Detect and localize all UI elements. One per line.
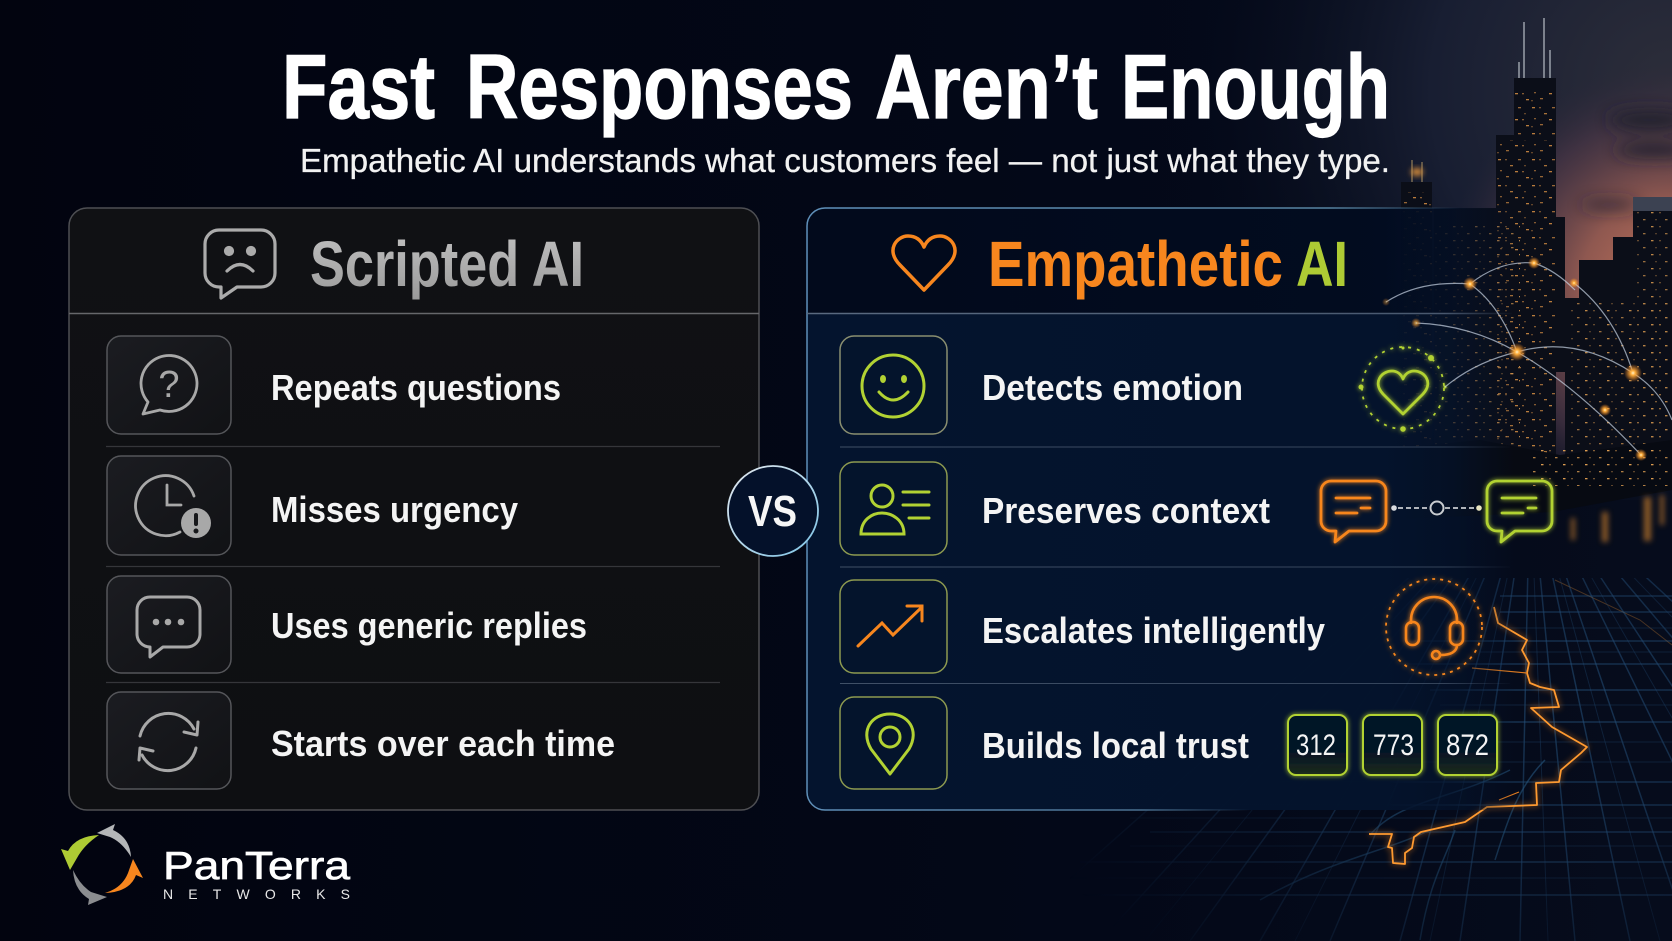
icon: sad chat bubble (205, 230, 275, 298)
title: Responses (466, 37, 853, 138)
connector between bubbles (1391, 502, 1482, 514)
icon: headset with dotted ring (1386, 579, 1482, 675)
row: Starts over each time (107, 692, 615, 789)
heading: Scripted AI: Scripted AI (310, 228, 584, 300)
row: Builds local trust: Builds local trust (982, 725, 1249, 766)
logo tagline: NETWORKS (163, 886, 350, 902)
icon: green chat bubble (1487, 481, 1552, 542)
title: Enough (1121, 37, 1390, 138)
row: Uses generic replies: Uses generic replies (271, 605, 587, 646)
logo: PanTerra Networks (61, 824, 350, 905)
row: Uses generic replies (107, 576, 587, 673)
badge: 872 (1438, 715, 1497, 775)
heading: Empathetic: Empathetic (988, 228, 1283, 300)
icon: heart with dotted ring (1358, 346, 1446, 432)
row: Escalates intelligently: Escalates intelligently (982, 610, 1325, 651)
badge: 773: 773 (1373, 729, 1414, 762)
badge: 312: 312 (1296, 729, 1336, 762)
title (282, 37, 1390, 138)
city skyline (1375, 18, 1672, 645)
icon: orange chat bubble (1321, 481, 1386, 542)
row: Repeats questions (107, 336, 561, 434)
row: Preserves context (840, 462, 1552, 555)
row: Repeats questions: Repeats questions (271, 367, 561, 408)
heading accent: AI: AI (1296, 228, 1348, 300)
badge: 773 (1363, 715, 1422, 775)
row: Detects emotion (840, 336, 1446, 434)
row: Misses urgency (107, 456, 518, 555)
panel: Empathetic AI (61, 208, 1672, 905)
row: Builds local trust (840, 697, 1497, 789)
row: Escalates intelligently (840, 579, 1482, 675)
glowing boundary line on map (1369, 607, 1587, 864)
panel: Scripted AI (69, 208, 759, 810)
badge: 312 (1288, 715, 1347, 775)
network arcs over city (1382, 257, 1672, 461)
subtitle: Empathetic AI understands what customers feel — not just what they type. (300, 142, 1390, 179)
icon: orange heart (893, 236, 955, 290)
row: Starts over each time: Starts over each time (271, 723, 615, 764)
street map grid (1116, 578, 1672, 941)
badge: 872: 872 (1446, 729, 1489, 762)
logo wordmark: PanTerra (163, 845, 350, 888)
title: Fast (282, 37, 435, 138)
VS badge (728, 466, 818, 556)
title: Aren’t (875, 37, 1098, 138)
VS badge: VS (748, 487, 797, 536)
row: Repeats questions: ? (158, 364, 180, 406)
row: Detects emotion: Detects emotion (982, 367, 1243, 408)
logo mark (61, 824, 143, 905)
row: Misses urgency: Misses urgency (271, 489, 518, 530)
row: Preserves context: Preserves context (982, 490, 1270, 531)
